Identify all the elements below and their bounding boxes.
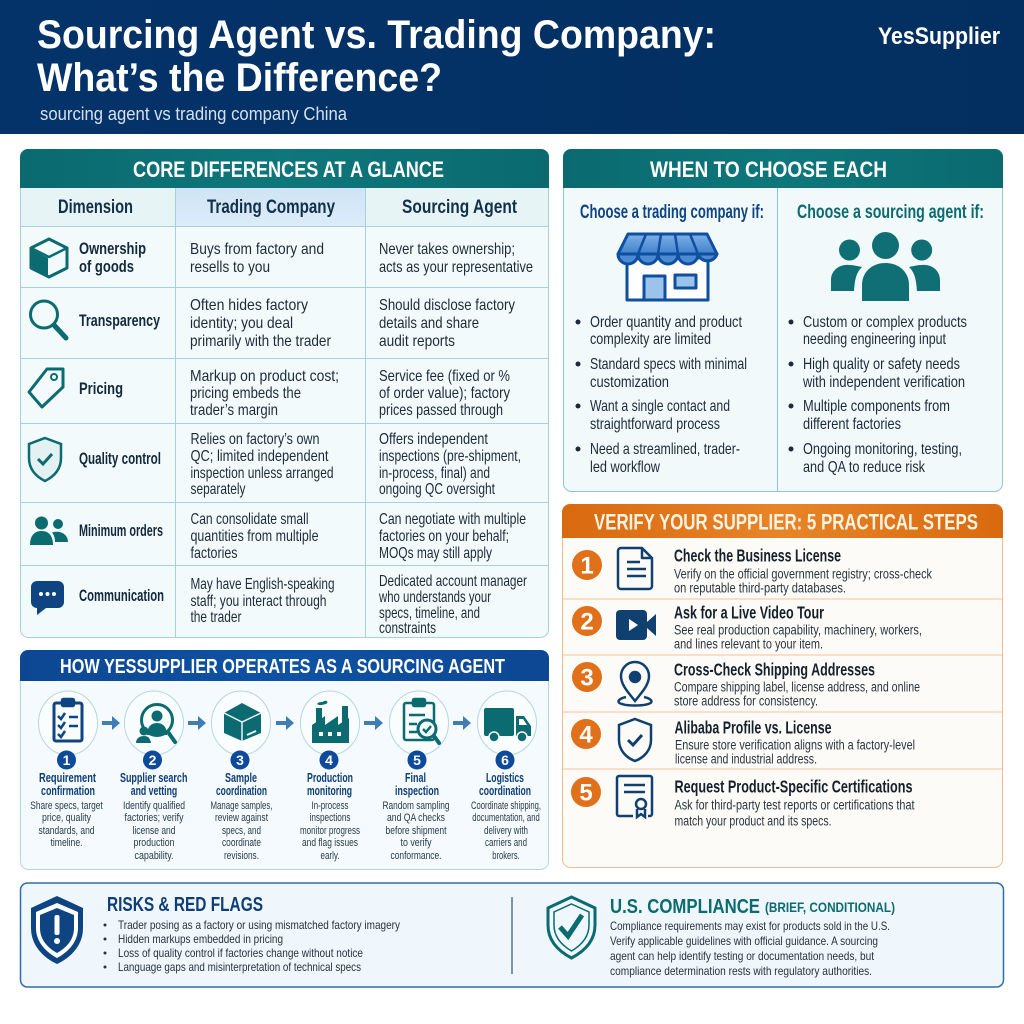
number badges: 1 bbox=[63, 752, 71, 768]
row: ownership: acts as your representative bbox=[379, 259, 533, 276]
row: ownership: Never takes ownership; bbox=[379, 241, 515, 258]
step: video tour bbox=[572, 602, 922, 652]
column headers: Sourcing Agent bbox=[402, 196, 517, 218]
icon: supplier search bbox=[136, 704, 175, 743]
step 6 text: Coordinate shipping, bbox=[471, 800, 541, 812]
row: minimum orders: factories on your behalf; bbox=[379, 528, 509, 545]
bullets: sourcing agent: Multiple components from bbox=[803, 398, 950, 415]
bullets: sourcing agent: with independent verification bbox=[802, 374, 965, 391]
row: quality control: Offers independent bbox=[379, 431, 488, 448]
icon: warning shield bbox=[31, 896, 83, 964]
row: communication: specs, timeline, and bbox=[379, 605, 480, 622]
step 5 text: before shipment bbox=[386, 825, 447, 837]
bullets: sourcing agent: Ongoing monitoring, testing, bbox=[803, 441, 962, 458]
step 5 text: conformance. bbox=[390, 850, 442, 862]
step 1 text: confirmation bbox=[41, 784, 95, 798]
step: business license: Verify on the official government registry; cross-check bbox=[674, 566, 932, 582]
step 5 text bbox=[382, 771, 450, 862]
step 3 text: Manage samples, bbox=[210, 800, 272, 812]
step 5 text: Final bbox=[405, 771, 426, 785]
heading: CORE DIFFERENCES AT A GLANCE bbox=[133, 157, 444, 182]
step 2 text: Identify qualified bbox=[123, 800, 185, 812]
row: minimum orders: factories bbox=[190, 545, 238, 562]
icon: factory bbox=[312, 701, 349, 743]
header banner bbox=[0, 0, 1024, 134]
bullets: trading company: straightforward process bbox=[590, 416, 720, 433]
bullets: sourcing agent: High quality or safety needs bbox=[803, 356, 960, 373]
bullets: sourcing agent: Custom or complex products bbox=[803, 314, 967, 331]
bullets: sourcing agent bbox=[788, 314, 967, 476]
bullets: trading company: Want a single contact and bbox=[590, 398, 730, 415]
heading: compliance: U.S. COMPLIANCE bbox=[610, 896, 760, 918]
step: alibaba profile: 4 bbox=[579, 722, 593, 748]
row: pricing: Markup on product cost; bbox=[190, 368, 339, 385]
step 4 text: and flag issues bbox=[302, 837, 358, 849]
step 5 text: to verify bbox=[400, 837, 432, 849]
step 6 text: Logistics bbox=[486, 771, 524, 785]
row: minimum orders: quantities from multiple bbox=[190, 528, 319, 545]
row: quality control: inspection unless arranged bbox=[190, 465, 334, 482]
panel: risks and compliance bbox=[20, 883, 1004, 987]
row: minimum orders bbox=[79, 511, 526, 562]
title bbox=[37, 13, 716, 100]
row: transparency: Should disclose factory bbox=[379, 297, 515, 314]
step 5 text: Random sampling bbox=[382, 800, 450, 812]
step circles bbox=[38, 691, 536, 755]
panel: core differences bbox=[20, 149, 549, 638]
step: video tour: 2 bbox=[580, 608, 594, 636]
row: pricing bbox=[79, 368, 510, 419]
step: shipping addresses: Cross-Check Shipping Addresses bbox=[674, 660, 875, 680]
step 6 text: brokers. bbox=[492, 850, 520, 862]
bullets: sourcing agent: and QA to reduce risk bbox=[803, 459, 926, 476]
step 4 text: In-process bbox=[312, 800, 349, 812]
step: certifications: match your product and its specs. bbox=[674, 814, 832, 828]
compliance text: compliance determination rests with regulatory authorities. bbox=[610, 964, 872, 978]
icon: compliance shield bbox=[548, 897, 595, 958]
step: alibaba profile: Alibaba Profile vs. License bbox=[674, 718, 832, 738]
subtitle: sourcing agent vs trading company China bbox=[40, 103, 348, 124]
bullets: trading company: customization bbox=[590, 374, 669, 391]
icon: clipboard checklist bbox=[54, 699, 82, 741]
row: pricing: pricing embeds the bbox=[190, 385, 301, 402]
icon: box bbox=[31, 239, 67, 277]
compliance text: Compliance requirements may exist for products sold in the U.S. bbox=[610, 919, 890, 933]
bullets: trading company bbox=[576, 314, 747, 476]
number badges: 5 bbox=[413, 752, 421, 768]
step 3 text: revisions. bbox=[224, 850, 259, 862]
row: communication: Dedicated account manager bbox=[379, 573, 527, 590]
title: Sourcing Agent vs. Trading Company: bbox=[37, 13, 716, 57]
row: minimum orders: Can negotiate with multiple bbox=[379, 511, 526, 528]
step: shipping addresses: store address for consistency. bbox=[674, 694, 818, 708]
step 4 text: early. bbox=[320, 850, 340, 862]
bullets: trading company: Standard specs with minimal bbox=[590, 356, 747, 373]
row: pricing: of order value); factory bbox=[379, 385, 510, 402]
step 6 text bbox=[471, 771, 541, 862]
row: communication: the trader bbox=[190, 609, 242, 626]
step: shipping addresses: Compare shipping label, license address, and online bbox=[674, 680, 920, 694]
row: transparency: primarily with the trader bbox=[190, 333, 332, 350]
number badges: 4 bbox=[325, 752, 333, 768]
step: business license: 1 bbox=[580, 552, 594, 580]
bullets: trading company: Order quantity and product bbox=[590, 314, 742, 331]
bullets: trading company: Need a streamlined, trader- bbox=[590, 441, 740, 458]
step 3 text: review against bbox=[215, 812, 269, 824]
heading: risks: RISKS & RED FLAGS bbox=[107, 894, 263, 916]
step 4 text: monitor progress bbox=[300, 825, 360, 837]
icon: video camera bbox=[616, 610, 656, 640]
risk bullets bbox=[104, 918, 400, 974]
number badges bbox=[57, 750, 514, 770]
step 6 text: coordination bbox=[479, 784, 531, 798]
icon: sample box bbox=[224, 703, 261, 741]
row: quality control: in-process, final) and bbox=[379, 465, 490, 482]
step 3 text: specs, and bbox=[222, 825, 261, 837]
step 1 text: Requirement bbox=[39, 771, 97, 785]
step 1 text: price, quality bbox=[42, 812, 91, 824]
step 2 text: Supplier search bbox=[120, 771, 187, 785]
row: ownership bbox=[79, 240, 533, 276]
heading: HOW YESSUPPLIER OPERATES AS A SOURCING AGENT bbox=[60, 656, 505, 678]
row: ownership: of goods bbox=[79, 258, 134, 276]
number badges: 3 bbox=[236, 752, 244, 768]
compliance text: agent can help identify testing or documentation needs, but bbox=[610, 949, 875, 963]
heading: compliance: (BRIEF, CONDITIONAL) bbox=[765, 899, 895, 915]
row: transparency: Often hides factory bbox=[190, 297, 308, 314]
row: pricing: Pricing bbox=[79, 380, 123, 398]
brand logo text: YesSupplier bbox=[878, 23, 1000, 50]
row: transparency: audit reports bbox=[379, 333, 455, 350]
row: transparency: identity; you deal bbox=[190, 315, 293, 332]
icon: truck bbox=[484, 708, 531, 742]
step: alibaba profile bbox=[571, 718, 915, 766]
row: quality control: QC; limited independent bbox=[190, 448, 329, 465]
icon: people bbox=[30, 516, 68, 545]
step: shipping addresses: 3 bbox=[580, 664, 594, 692]
row: ownership: Buys from factory and bbox=[190, 241, 324, 258]
risk bullets: Trader posing as a factory or using mismatched factory imagery bbox=[118, 918, 400, 932]
step 2 text bbox=[120, 771, 187, 862]
step: alibaba profile: Ensure store verification aligns with a factory-level bbox=[675, 738, 915, 752]
step 2 text: and vetting bbox=[131, 784, 177, 798]
icon: speech bubble bbox=[31, 581, 64, 615]
row: quality control: ongoing QC oversight bbox=[379, 481, 495, 498]
row: communication: constraints bbox=[379, 620, 436, 637]
title: What’s the Difference? bbox=[37, 56, 442, 100]
step 3 text: coordination bbox=[216, 784, 267, 798]
bullets: sourcing agent: different factories bbox=[803, 416, 901, 433]
step: business license: on reputable third-party databases. bbox=[674, 580, 846, 596]
column headers: Trading Company bbox=[207, 196, 335, 218]
row: communication: staff; you interact through bbox=[190, 593, 326, 610]
row: transparency: Transparency bbox=[79, 312, 161, 330]
row: transparency bbox=[79, 297, 515, 350]
column headers bbox=[58, 196, 517, 218]
row: communication: May have English-speaking bbox=[190, 576, 334, 593]
icon: verification shield bbox=[619, 719, 651, 761]
row: transparency: details and share bbox=[379, 315, 479, 332]
step 3 text bbox=[210, 771, 272, 862]
step: alibaba profile: license and industrial address. bbox=[675, 752, 817, 766]
bullets: trading company: led workflow bbox=[590, 459, 660, 476]
row: pricing: prices passed through bbox=[379, 402, 503, 419]
step 4 text: monitoring bbox=[307, 784, 352, 798]
step: video tour: Ask for a Live Video Tour bbox=[674, 602, 824, 622]
step: shipping addresses bbox=[572, 660, 920, 708]
step 4 text: inspections bbox=[310, 812, 351, 824]
row: quality control: Quality control bbox=[79, 450, 161, 468]
step 5 text: inspection bbox=[395, 784, 439, 798]
step 2 text: license and bbox=[132, 825, 176, 837]
subheading: trading company: Choose a trading company if: bbox=[580, 201, 764, 223]
risk bullets: Loss of quality control if factories change without notice bbox=[118, 946, 363, 960]
number badges: 2 bbox=[149, 752, 157, 768]
row: quality control: separately bbox=[190, 481, 246, 498]
step: business license bbox=[572, 546, 932, 596]
row: quality control bbox=[79, 431, 521, 498]
icon: group of people bbox=[831, 232, 940, 301]
risk bullets: Hidden markups embedded in pricing bbox=[118, 932, 283, 946]
step: certifications: Request Product-Specific Certifications bbox=[674, 776, 913, 796]
step 6 text: documentation, and bbox=[472, 812, 540, 824]
row: minimum orders: Minimum orders bbox=[79, 522, 163, 540]
row: pricing: Service fee (fixed or % bbox=[379, 368, 510, 385]
panel: when to choose each bbox=[563, 149, 1003, 492]
row: ownership: Ownership bbox=[79, 240, 146, 258]
panel: how yessupplier operates bbox=[20, 650, 549, 870]
row: communication bbox=[79, 573, 527, 637]
step: video tour: and lines relevant to your item. bbox=[674, 636, 823, 652]
icon: magnifier bbox=[30, 301, 66, 338]
row: minimum orders: Can consolidate small bbox=[190, 511, 308, 528]
row: communication: Communication bbox=[79, 587, 164, 605]
heading: WHEN TO CHOOSE EACH bbox=[650, 157, 887, 182]
arrows between steps bbox=[102, 716, 471, 730]
compliance text: Verify applicable guidelines with official guidance. A sourcing bbox=[610, 934, 878, 948]
step 2 text: factories; verify bbox=[124, 812, 184, 824]
number badges: 6 bbox=[501, 752, 509, 768]
row: ownership: resells to you bbox=[190, 259, 270, 276]
step 1 text: Share specs, target bbox=[30, 800, 103, 812]
risk bullets: Language gaps and misinterpretation of technical specs bbox=[118, 960, 361, 974]
row: pricing: trader’s margin bbox=[190, 402, 278, 419]
row: communication: who understands your bbox=[378, 589, 491, 606]
step 1 text: standards, and bbox=[38, 825, 94, 837]
panel: verify your supplier bbox=[562, 504, 1003, 868]
step 3 text: coordinate bbox=[222, 837, 261, 849]
step 6 text: delivery with bbox=[484, 825, 528, 837]
icon: location pin bbox=[618, 662, 652, 706]
heading: compliance bbox=[610, 896, 895, 918]
step 1 text: timeline. bbox=[50, 837, 82, 849]
bullets: sourcing agent: needing engineering input bbox=[803, 331, 946, 348]
step 2 text: capability. bbox=[134, 850, 174, 862]
column headers: Dimension bbox=[58, 196, 133, 218]
step 4 text bbox=[300, 771, 360, 862]
step: video tour: See real production capability, machinery, workers, bbox=[674, 622, 922, 638]
step 1 text bbox=[30, 771, 103, 849]
step 5 text: and QA checks bbox=[387, 812, 445, 824]
step: business license: Check the Business License bbox=[674, 546, 841, 566]
step 6 text: carriers and bbox=[485, 837, 527, 849]
compliance text bbox=[610, 919, 890, 978]
bullets: trading company: complexity are limited bbox=[590, 331, 711, 348]
icon: inspection clipboard bbox=[404, 699, 439, 743]
icon: shield check bbox=[29, 438, 61, 481]
row: quality control: inspections (pre-shipment, bbox=[379, 448, 521, 465]
step 2 text: production bbox=[134, 837, 174, 849]
icon: price tag bbox=[29, 369, 63, 407]
step: certifications: Ask for third-party test reports or certifications that bbox=[674, 798, 915, 812]
row: minimum orders: MOQs may still apply bbox=[379, 545, 492, 562]
row: quality control: Relies on factory’s own bbox=[190, 431, 320, 448]
icon: document bbox=[618, 548, 652, 589]
step 3 text: Sample bbox=[225, 771, 257, 785]
step: certifications: 5 bbox=[579, 780, 593, 806]
step: certifications bbox=[571, 776, 915, 828]
icon: certificate bbox=[617, 776, 652, 817]
icon: storefront bbox=[618, 234, 717, 300]
step 4 text: Production bbox=[307, 771, 353, 785]
